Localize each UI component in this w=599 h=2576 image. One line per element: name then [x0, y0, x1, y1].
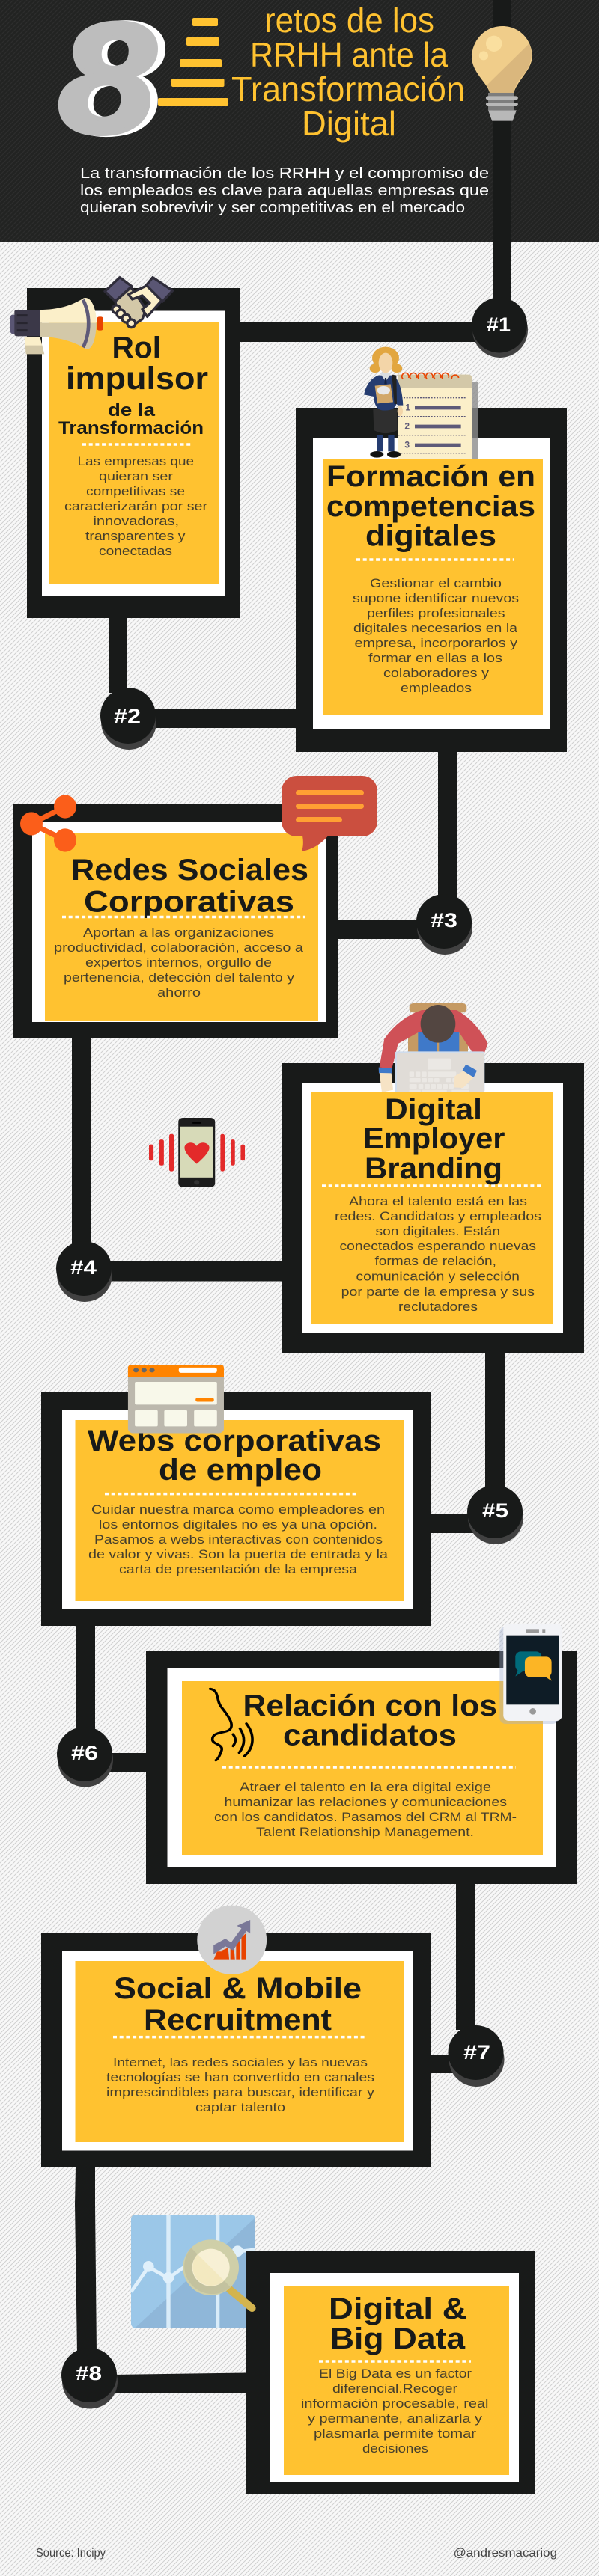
- heading: Digital &: [329, 2292, 467, 2325]
- icon: megaphone: [10, 298, 103, 354]
- body text: y permanente, analizarla y: [308, 2412, 483, 2426]
- heading: Big Data: [330, 2322, 466, 2355]
- body text: quieran ser: [99, 470, 174, 483]
- body text: [353, 577, 519, 695]
- title: retos de los: [264, 1, 434, 40]
- body text: [88, 1503, 389, 1576]
- heading: competencias: [326, 490, 535, 523]
- body text: tecnologías se han convertido en canales: [106, 2071, 374, 2084]
- heading: [58, 331, 208, 438]
- body text: comunicación y selección: [356, 1270, 520, 1284]
- icon: magnifier: [183, 2239, 252, 2308]
- body text: [64, 455, 208, 558]
- panel 7: Social & Mobile Recruitment: [41, 1933, 431, 2167]
- body text: carta de presentación de la empresa: [119, 1563, 358, 1576]
- header background: [0, 0, 599, 242]
- heading: de la: [108, 400, 156, 420]
- heading: Corporativas: [84, 886, 294, 919]
- icon: growth chart: [197, 1906, 267, 1974]
- body text: caracterizarán por ser: [64, 500, 208, 513]
- panel 4 content: [311, 1092, 553, 1324]
- intro text: [80, 165, 489, 216]
- heading: [243, 1689, 497, 1752]
- timeline connectors: [72, 0, 511, 2393]
- body text: expertos internos, orgullo de: [85, 956, 272, 970]
- heading: candidatos: [283, 1719, 457, 1752]
- panel 6: Relación con los candidatos: [146, 1651, 577, 1884]
- body text: con los candidatos. Pasamos del CRM al TRM-: [214, 1811, 517, 1824]
- body text: decisiones: [362, 2442, 428, 2456]
- heading: Employer: [363, 1122, 505, 1155]
- heading: [88, 1425, 381, 1487]
- body text: Pasamos a webs interactivas con contenidos: [94, 1533, 383, 1546]
- heading: Recruitment: [144, 2004, 332, 2037]
- badge #4: [56, 1241, 112, 1302]
- heading: digitales: [365, 519, 496, 552]
- badge #7: #7: [463, 2041, 490, 2063]
- badge #3: #3: [431, 909, 457, 931]
- icon: notepad: 3: [404, 440, 410, 450]
- icon: stacked bars: [158, 18, 228, 106]
- heading: Digital: [385, 1093, 482, 1126]
- body text: información procesable, real: [301, 2397, 488, 2411]
- icon: share: [20, 795, 76, 852]
- icon: notepad: [398, 373, 478, 459]
- icon: student girl: [364, 347, 403, 458]
- icon: phone with heart: [149, 1118, 245, 1187]
- body text: son digitales. Están: [376, 1225, 500, 1238]
- body text: imprescindibles para buscar, identificar y: [106, 2086, 375, 2099]
- heading: Rol: [112, 331, 161, 364]
- icon: light bulb: [472, 26, 532, 121]
- heading: Branding: [365, 1152, 502, 1185]
- body text: ahorro: [157, 986, 201, 1000]
- icon: person at laptop: [379, 1003, 488, 1092]
- badge #3: [416, 894, 472, 955]
- body text: formar en ellas a los: [368, 652, 502, 665]
- body text: [301, 2367, 488, 2456]
- body text: perfiles profesionales: [367, 607, 505, 620]
- body text: formas de relación,: [374, 1255, 496, 1268]
- badge #5: [467, 1485, 523, 1544]
- body text: [214, 1781, 517, 1839]
- body text: Las empresas que: [78, 455, 194, 468]
- badge #2: [100, 688, 156, 750]
- body text: diferencial.Recoger: [332, 2382, 458, 2396]
- heading: Redes Sociales: [71, 854, 308, 887]
- body text: Atraer el talento en la era digital exige: [240, 1781, 491, 1794]
- heading: [326, 460, 535, 552]
- panel 4: Digital Employer Branding: [282, 1063, 584, 1353]
- badge #1: #1: [487, 313, 511, 336]
- badge #6: [57, 1727, 113, 1787]
- title: RRHH ante la: [250, 35, 448, 74]
- body text: transparentes y: [85, 530, 186, 543]
- body text: productividad, colaboración, acceso a: [54, 941, 304, 955]
- heading: Webs corporativas: [88, 1425, 381, 1457]
- heading: Transformación: [58, 418, 204, 438]
- badge #4: #4: [70, 1256, 97, 1279]
- panel 5: Webs corporativas de empleo: [41, 1392, 431, 1626]
- badge #1: [472, 298, 528, 358]
- panel 3: Redes Sociales Corporativas: [13, 804, 338, 1038]
- icon: big data chart: [131, 2215, 255, 2328]
- body text: humanizar las relaciones y comunicaciones: [225, 1796, 507, 1809]
- icon: web browser: [128, 1365, 224, 1434]
- heading: Relación con los: [243, 1689, 497, 1722]
- panel 2: Formación en competencias digitales: [296, 408, 567, 752]
- body text: empleados: [401, 682, 472, 695]
- body text: pertenencia, detección del talento y: [64, 971, 295, 985]
- heading: [71, 854, 308, 919]
- body text: El Big Data es un factor: [319, 2367, 472, 2381]
- body text: Internet, las redes sociales y las nuevas: [113, 2056, 368, 2069]
- body text: innovadoras,: [93, 515, 179, 528]
- badge #7: [448, 2025, 505, 2087]
- heading: [114, 1972, 362, 2037]
- intro text: La transformación de los RRHH y el compromiso de: [80, 165, 489, 182]
- body text: digitales necesarios en la: [353, 622, 518, 635]
- body text: Cuidar nuestra marca como empleadores en: [91, 1503, 385, 1517]
- body text: [335, 1195, 541, 1314]
- heading: de empleo: [159, 1454, 322, 1487]
- body text: empresa, incorporarlos y: [355, 637, 518, 650]
- body text: supone identificar nuevos: [353, 592, 519, 605]
- heading: Formación en: [326, 460, 535, 493]
- body text: conectados esperando nuevas: [340, 1240, 536, 1253]
- author handle: @andresmacariog: [454, 2547, 557, 2560]
- panel 8: Digital & Big Data: [246, 2251, 535, 2494]
- icon: nose speaking: [210, 1689, 252, 1760]
- body text: los entornos digitales no es ya una opción.: [99, 1518, 377, 1532]
- badge #2: #2: [114, 705, 141, 727]
- panel 2 content: [323, 459, 543, 715]
- icon: notepad: 1: [405, 403, 410, 413]
- body text: de valor y vivas. Son la puerta de entrada y la: [88, 1548, 389, 1561]
- intro text: quieran sobrevivir y ser competitivas en el mercado: [80, 200, 465, 216]
- badge #6: #6: [71, 1742, 98, 1764]
- badge #8: #8: [76, 2362, 102, 2384]
- body text: [106, 2056, 375, 2114]
- panel 1: Rol impulsor: [27, 288, 240, 618]
- body text: Ahora el talento está en las: [349, 1195, 527, 1208]
- body text: Gestionar el cambio: [370, 577, 502, 590]
- source credit: Source: Incipy: [36, 2547, 106, 2560]
- body text: competitivas se: [86, 485, 185, 498]
- body text: Talent Relationship Management.: [256, 1826, 474, 1839]
- icon: smartphone with chat: [499, 1624, 562, 1724]
- heading: [329, 2292, 467, 2355]
- badge #5: #5: [482, 1499, 508, 1522]
- body text: redes. Candidatos y empleados: [335, 1210, 541, 1223]
- body text: [54, 926, 304, 1000]
- title: [231, 1, 465, 143]
- title: Digital: [302, 104, 396, 143]
- icon: handshake: [105, 278, 173, 328]
- body text: captar talento: [195, 2101, 285, 2114]
- icon: notepad: 2: [404, 421, 410, 432]
- heading: impulsor: [66, 361, 208, 397]
- body text: colaboradores y: [383, 667, 490, 680]
- body text: reclutadores: [398, 1300, 478, 1314]
- heading: Social & Mobile: [114, 1972, 362, 2005]
- body text: plasmarla permite tomar: [314, 2427, 477, 2441]
- body text: por parte de la empresa y sus: [341, 1285, 535, 1299]
- title: Transformación: [231, 70, 465, 108]
- body text: Aportan a las organizaciones: [83, 926, 274, 940]
- intro text: los empleados es clave para aquellas empresas que: [80, 183, 489, 199]
- icon: chat bubble: [282, 776, 377, 851]
- heading: [363, 1093, 505, 1185]
- badge #8: [61, 2348, 118, 2409]
- body text: conectadas: [99, 545, 172, 558]
